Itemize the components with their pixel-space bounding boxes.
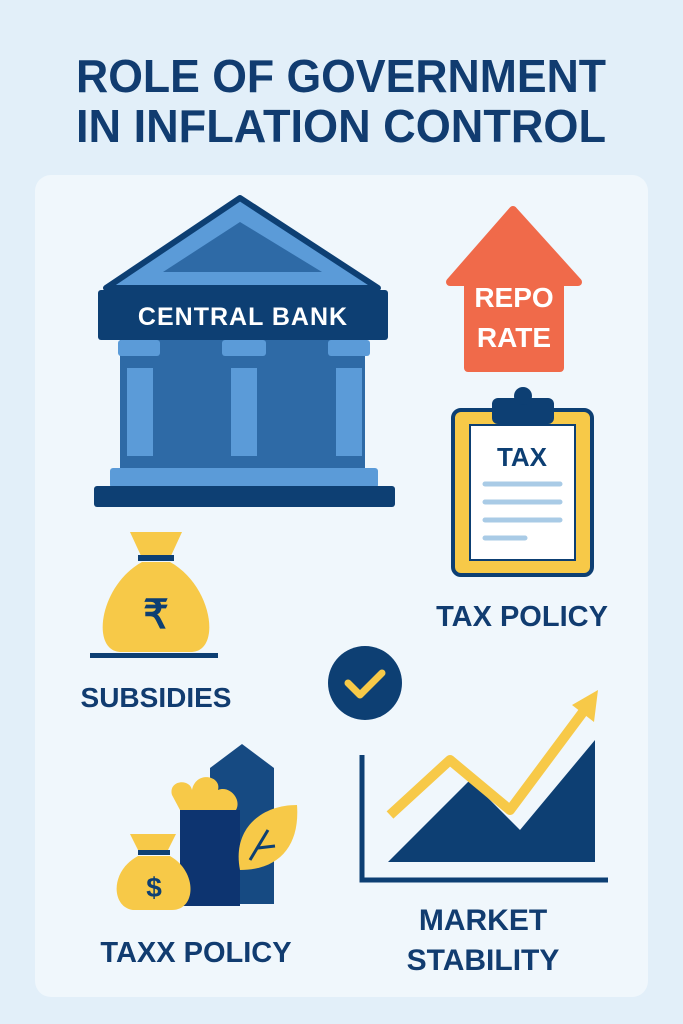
label: tax policy: TAX POLICY: [436, 601, 608, 633]
icon: tax policy group: [117, 744, 297, 910]
icon: central bank: [94, 198, 395, 507]
icon: rupee money bag: [90, 532, 218, 658]
label: taxx policy: TAXX POLICY: [100, 937, 292, 969]
icon: tax policy group: $: [146, 872, 162, 903]
icon: repo rate arrow: REPO: [474, 282, 554, 313]
icon: central bank: CENTRAL BANK: [138, 303, 348, 331]
icon: repo rate arrow: RATE: [477, 322, 551, 353]
title: ROLE OF GOVERNMENT: [76, 50, 606, 102]
title: [76, 50, 606, 152]
label: market stability: [407, 904, 559, 977]
label: market stability: STABILITY: [407, 944, 559, 977]
chart: market stability: [362, 690, 608, 880]
title: IN INFLATION CONTROL: [76, 100, 606, 152]
panel: background card: [35, 175, 648, 997]
icon: tax clipboard: [453, 387, 592, 575]
icon: repo rate arrow: [450, 210, 578, 368]
label: market stability: MARKET: [419, 904, 547, 937]
icon: tax clipboard: TAX: [497, 442, 548, 472]
icon: rupee money bag: ₹: [143, 593, 169, 637]
label: subsidies: SUBSIDIES: [81, 682, 231, 713]
icon: check circle: [328, 646, 402, 720]
